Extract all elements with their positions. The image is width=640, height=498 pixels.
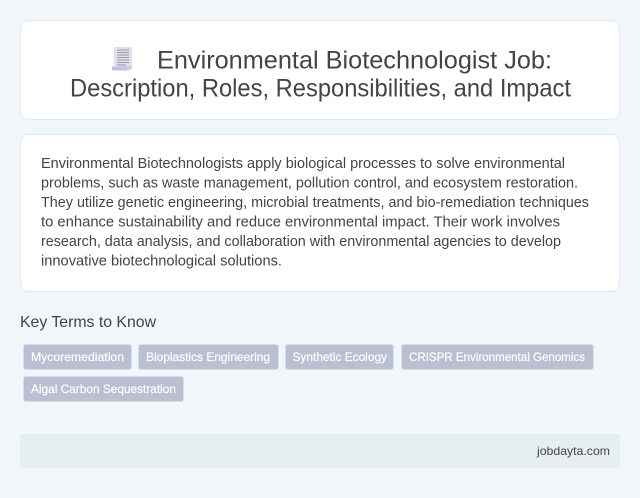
text block: description: to enhance sustainability and reduce environmental impact. Their work involves [41,214,560,230]
text block: description: Environmental Biotechnologists apply biological processes to solve environmental [41,156,565,172]
text block: description: research, data analysis, and collaboration with environmental agencies to develop [41,234,561,250]
heading: title: Environmental Biotechnologist Job: [157,46,552,74]
footer bar [20,434,620,468]
tag: Bioplastics Engineering [138,344,278,370]
tag: Algal Carbon Sequestration: Algal Carbon Sequestration [31,382,176,396]
tag: Synthetic Ecology: Synthetic Ecology [292,350,387,364]
heading: title: Description, Roles, Responsibilities, and Impact [70,74,571,102]
text block: description: innovative biotechnological solutions. [41,254,282,270]
tag: Synthetic Ecology [286,344,394,370]
tag: Algal Carbon Sequestration [24,376,184,402]
text block: description: They utilize genetic engineering, microbial treatments, and bio-remediation techniques [41,195,589,211]
panel: description card [20,134,620,292]
footer bar: jobdayta.com [536,444,610,458]
panel: title card [20,20,620,120]
text block: description [41,156,589,270]
tag: CRISPR Environmental Genomics: CRISPR Environmental Genomics [409,350,585,364]
tag: CRISPR Environmental Genomics [402,344,594,370]
heading: key terms: Key Terms to Know [20,314,156,331]
text block: description: problems, such as waste management, pollution control, and ecosystem restoration. [41,176,578,192]
tag: Mycoremediation [24,344,132,370]
tag: Mycoremediation: Mycoremediation [31,350,124,364]
icon: document scroll [112,47,132,70]
tag: Bioplastics Engineering: Bioplastics Engineering [146,350,270,364]
heading: title [70,46,571,102]
